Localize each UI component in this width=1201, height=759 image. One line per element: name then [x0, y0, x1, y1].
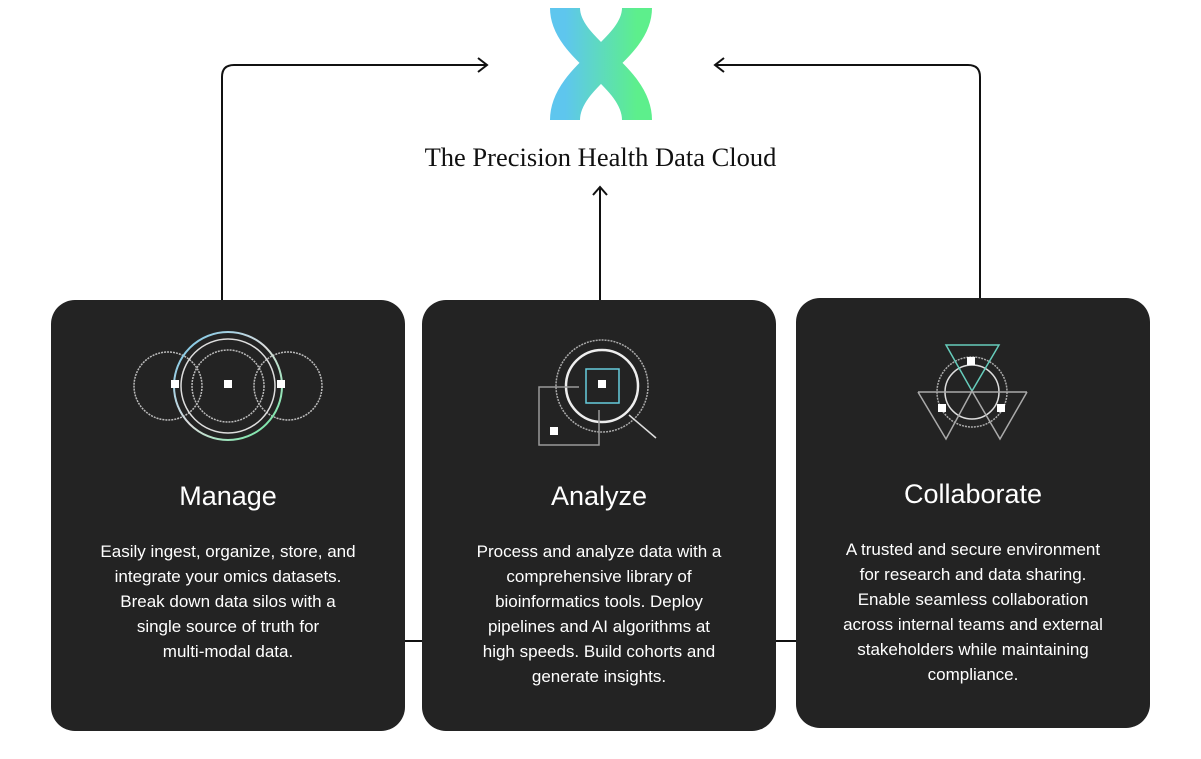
panel: collaborate: compliance. [928, 665, 1018, 684]
panel: collaborate: Enable seamless collaboration [858, 590, 1088, 609]
panel: manage: Manage [179, 481, 277, 511]
panel: manage: Break down data silos with a [120, 592, 336, 611]
panel: collaborate [796, 298, 1150, 728]
panel: analyze: pipelines and AI algorithms at [488, 617, 710, 636]
panel: collaborate: across internal teams and external [843, 615, 1103, 634]
logo [565, 8, 637, 120]
icon: triangles [917, 344, 1028, 440]
icon: circles [133, 331, 323, 441]
panel: analyze [422, 300, 776, 731]
panel: analyze: bioinformatics tools. Deploy [495, 592, 703, 611]
panel: collaborate: for research and data sharing. [860, 565, 1086, 584]
panel: manage: single source of truth for [137, 617, 319, 636]
panel: collaborate: Collaborate [904, 479, 1042, 509]
panel: manage: multi-modal data. [163, 642, 293, 661]
panel: collaborate: stakeholders while maintaining [857, 640, 1089, 659]
panel: analyze: comprehensive library of [506, 567, 692, 586]
panel: collaborate: A trusted and secure environment [846, 540, 1100, 559]
icon: magnifier [538, 339, 656, 446]
panel: manage: integrate your omics datasets. [115, 567, 341, 586]
panel: analyze: Analyze [551, 481, 647, 511]
panel: analyze: generate insights. [532, 667, 666, 686]
panel: analyze: high speeds. Build cohorts and [483, 642, 715, 661]
title: The Precision Health Data Cloud [425, 142, 776, 172]
panel: manage: Easily ingest, organize, store, and [100, 542, 356, 561]
panel: analyze: Process and analyze data with a [477, 542, 721, 561]
panel: manage [51, 300, 405, 731]
